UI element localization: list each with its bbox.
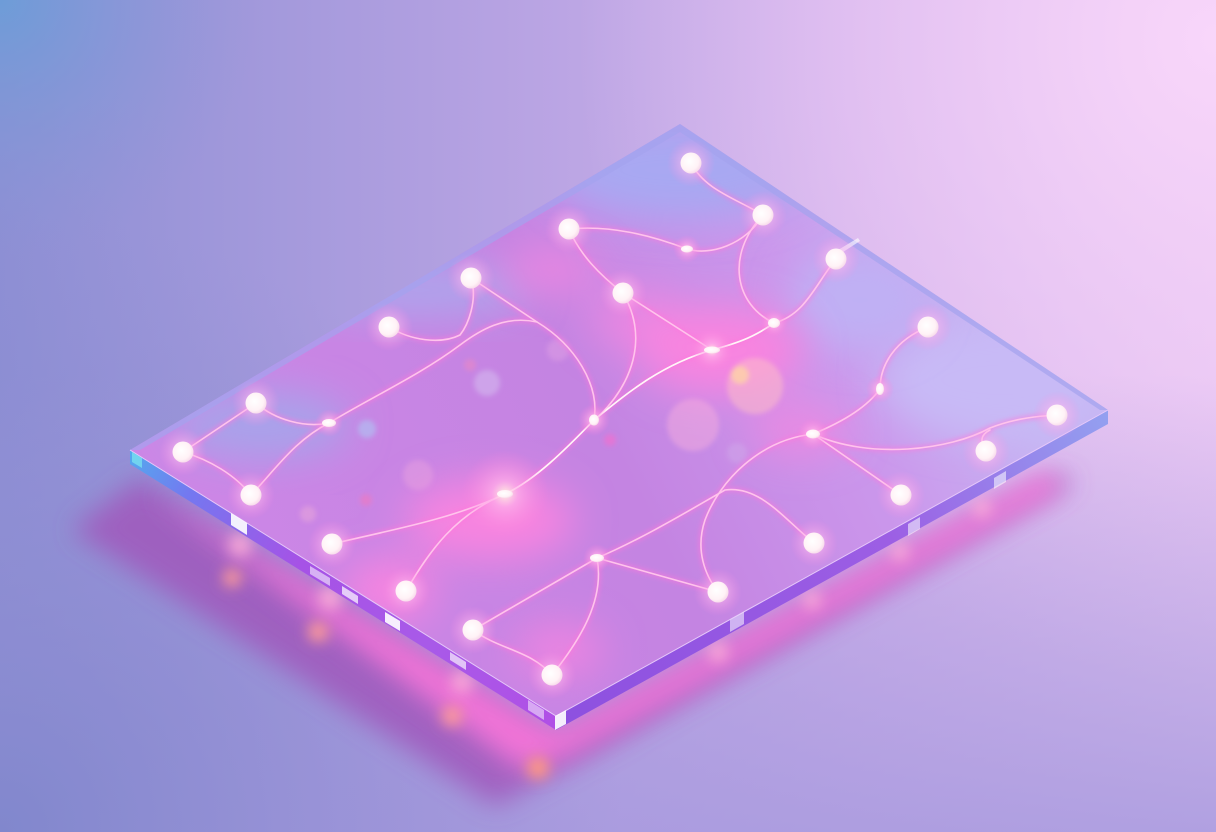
pale blue corners of glass [170,120,1120,460]
back bevel of the glass [130,124,1108,450]
soft glow behind traces [183,163,1057,675]
glass plate top surface [130,120,1120,716]
circuit nodes [172,152,1068,686]
shadow and pink glow under the plate [72,470,1075,806]
glass plate edges [130,238,1108,730]
node glows [159,139,1081,699]
crisp traces [183,163,1057,675]
pink blotches [345,248,850,675]
circuit traces [183,163,1057,675]
edge highlights [132,238,1006,730]
bokeh spots [300,339,783,522]
